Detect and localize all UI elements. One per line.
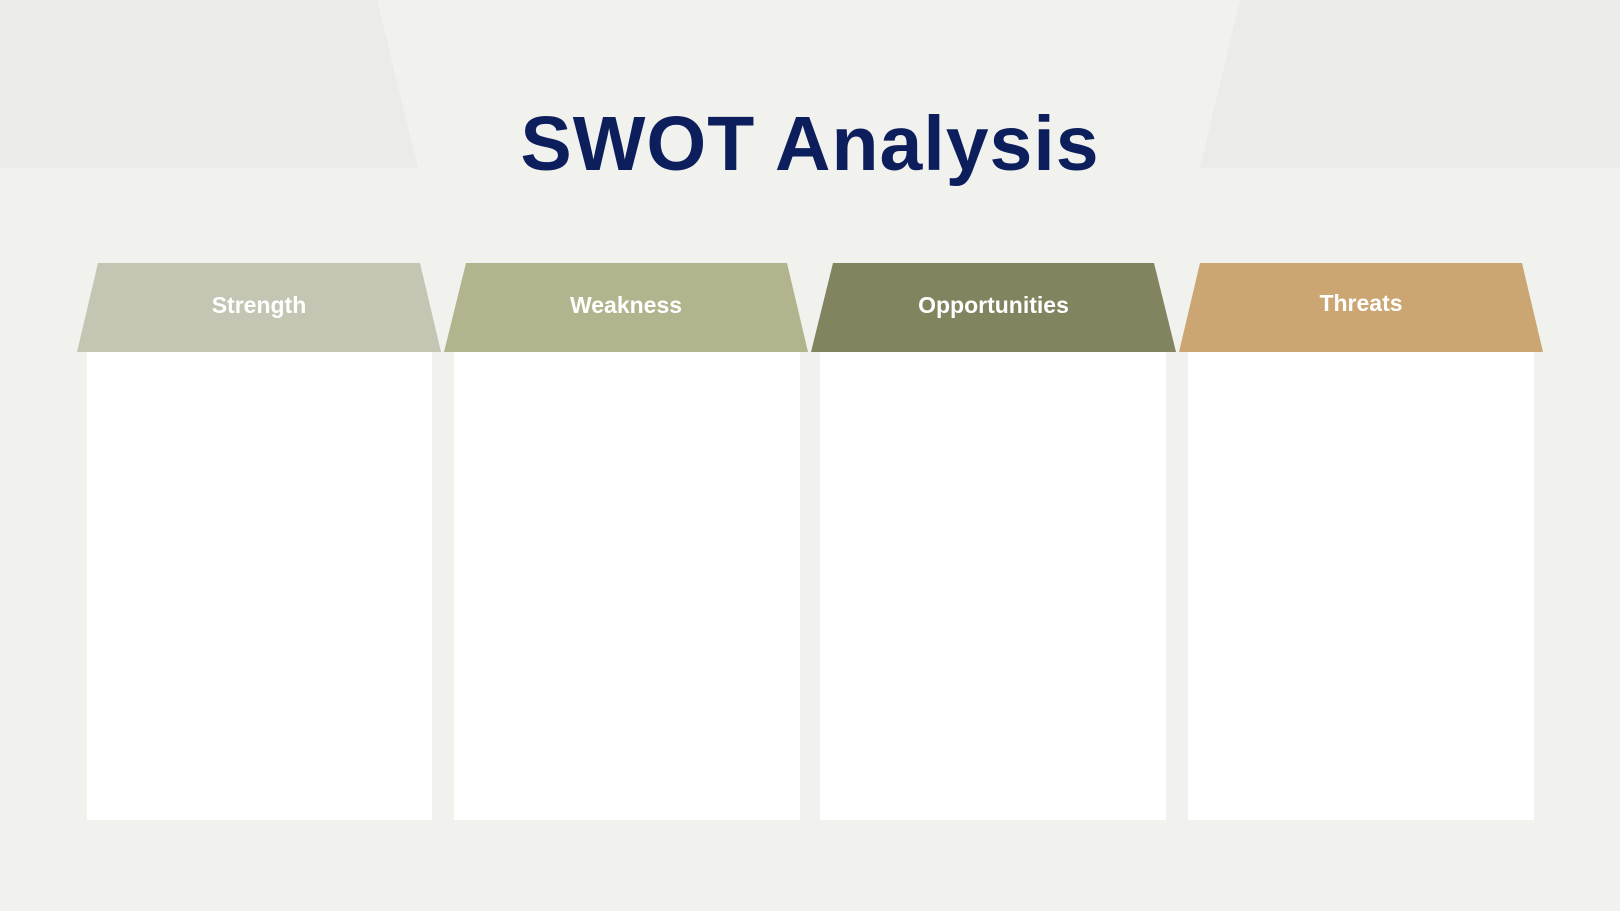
panel: strength (77, 263, 441, 820)
background shapes (0, 0, 1620, 170)
panel: weakness (444, 263, 808, 820)
threats body (1188, 352, 1534, 820)
title: SWOT Analysis (520, 101, 1100, 187)
threats header: Threats (1319, 290, 1403, 316)
opportunities header (811, 263, 1176, 352)
strength header (77, 263, 441, 352)
opportunities header: Opportunities (918, 292, 1069, 318)
weakness body (454, 352, 800, 820)
strength body (87, 352, 432, 820)
opportunities body (820, 352, 1166, 820)
weakness header (444, 263, 808, 352)
weakness header: Weakness (570, 292, 682, 318)
threats header (1179, 263, 1543, 352)
panel: threats (1179, 263, 1543, 820)
panel: opportunities (811, 263, 1176, 820)
strength header: Strength (212, 292, 306, 318)
